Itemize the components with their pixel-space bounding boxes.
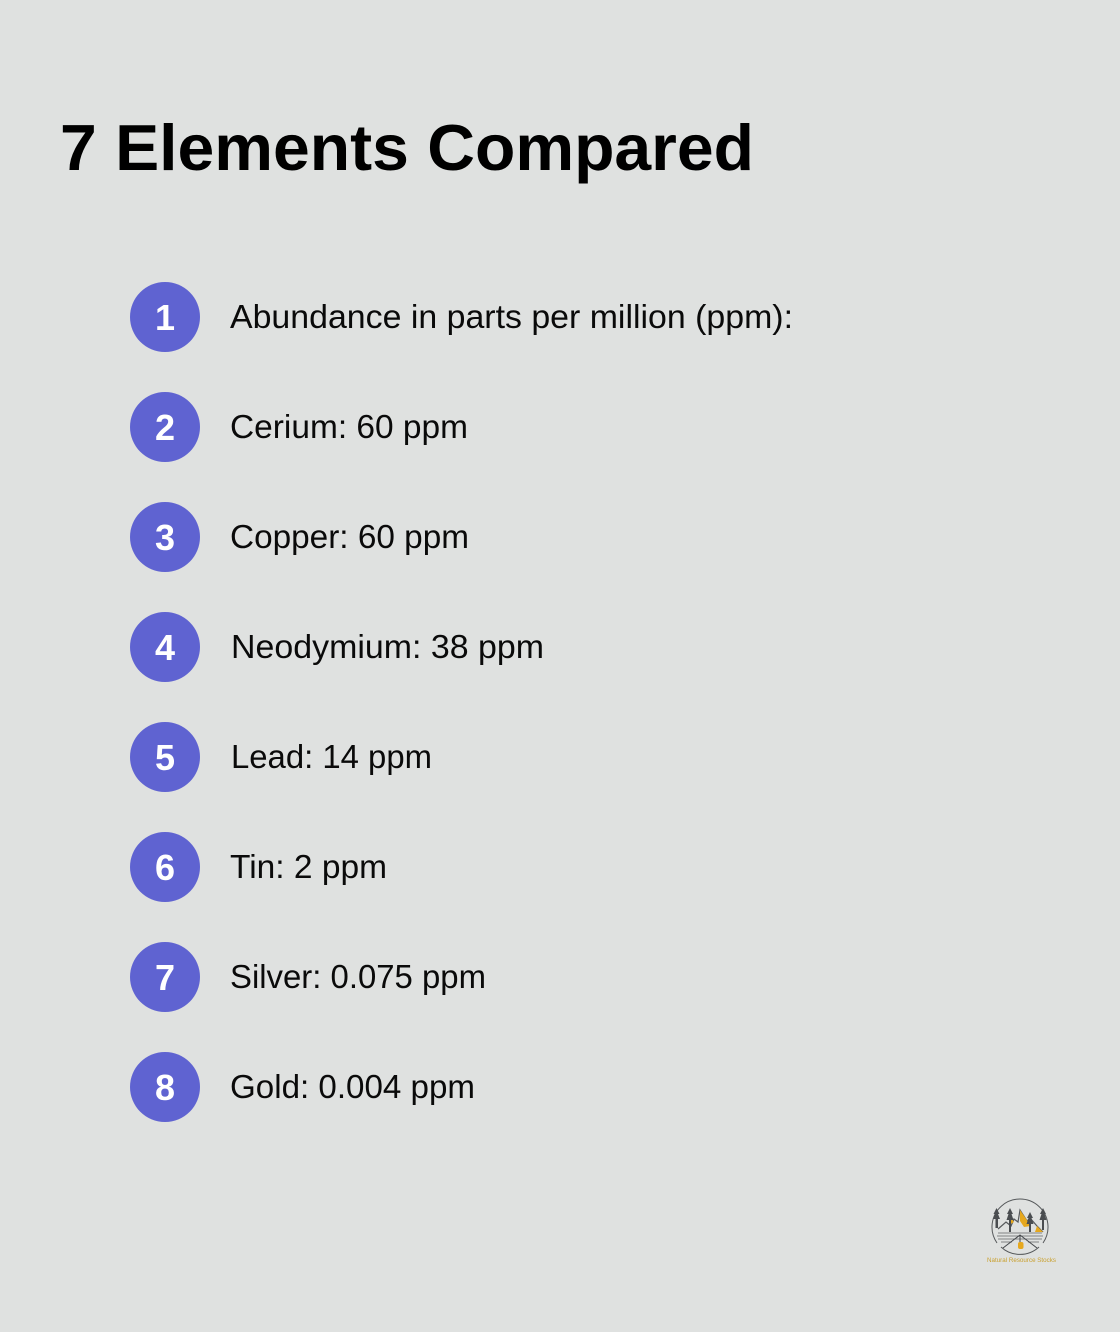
list item 2: Cerium: 60 ppm [230, 408, 468, 445]
icon: tent [1003, 1235, 1037, 1248]
list item 5: 5 [155, 737, 175, 778]
list item 6: Tin: 2 ppm [230, 848, 387, 885]
list item 3 [130, 502, 469, 572]
list item 4: Neodymium: 38 ppm [231, 628, 544, 665]
list item 3: Copper: 60 ppm [230, 518, 469, 555]
list item 4 [130, 612, 544, 682]
icon: gold peaks [1009, 1210, 1043, 1232]
list item 7: Silver: 0.075 ppm [230, 958, 486, 995]
list item 1 [130, 282, 793, 352]
logo: Natural Resource Stocks [987, 1199, 1056, 1264]
title: 7 Elements Compared [60, 111, 754, 184]
list item 2 [130, 392, 468, 462]
list item 3: 3 [155, 517, 175, 558]
list item 7 [130, 942, 486, 1012]
logo wordmark: Natural Resource Stocks [987, 1257, 1056, 1264]
icon: water lines [997, 1233, 1043, 1242]
list item 6 [130, 832, 387, 902]
list item 6: 6 [155, 847, 175, 888]
list item 1: Abundance in parts per million (ppm): [230, 298, 793, 335]
list item 1: 1 [155, 297, 175, 338]
icon: emblem ring [992, 1199, 1048, 1254]
icon: mountains [998, 1210, 1043, 1232]
icon: pine trees [993, 1208, 1046, 1232]
list item 4: 4 [155, 627, 175, 668]
list item 8: 8 [155, 1067, 175, 1108]
list item 7: 7 [155, 957, 175, 998]
list item 8 [130, 1052, 475, 1122]
list item 5 [130, 722, 432, 792]
list item 2: 2 [155, 407, 175, 448]
list item 5: Lead: 14 ppm [231, 738, 432, 775]
list item 8: Gold: 0.004 ppm [230, 1068, 475, 1105]
